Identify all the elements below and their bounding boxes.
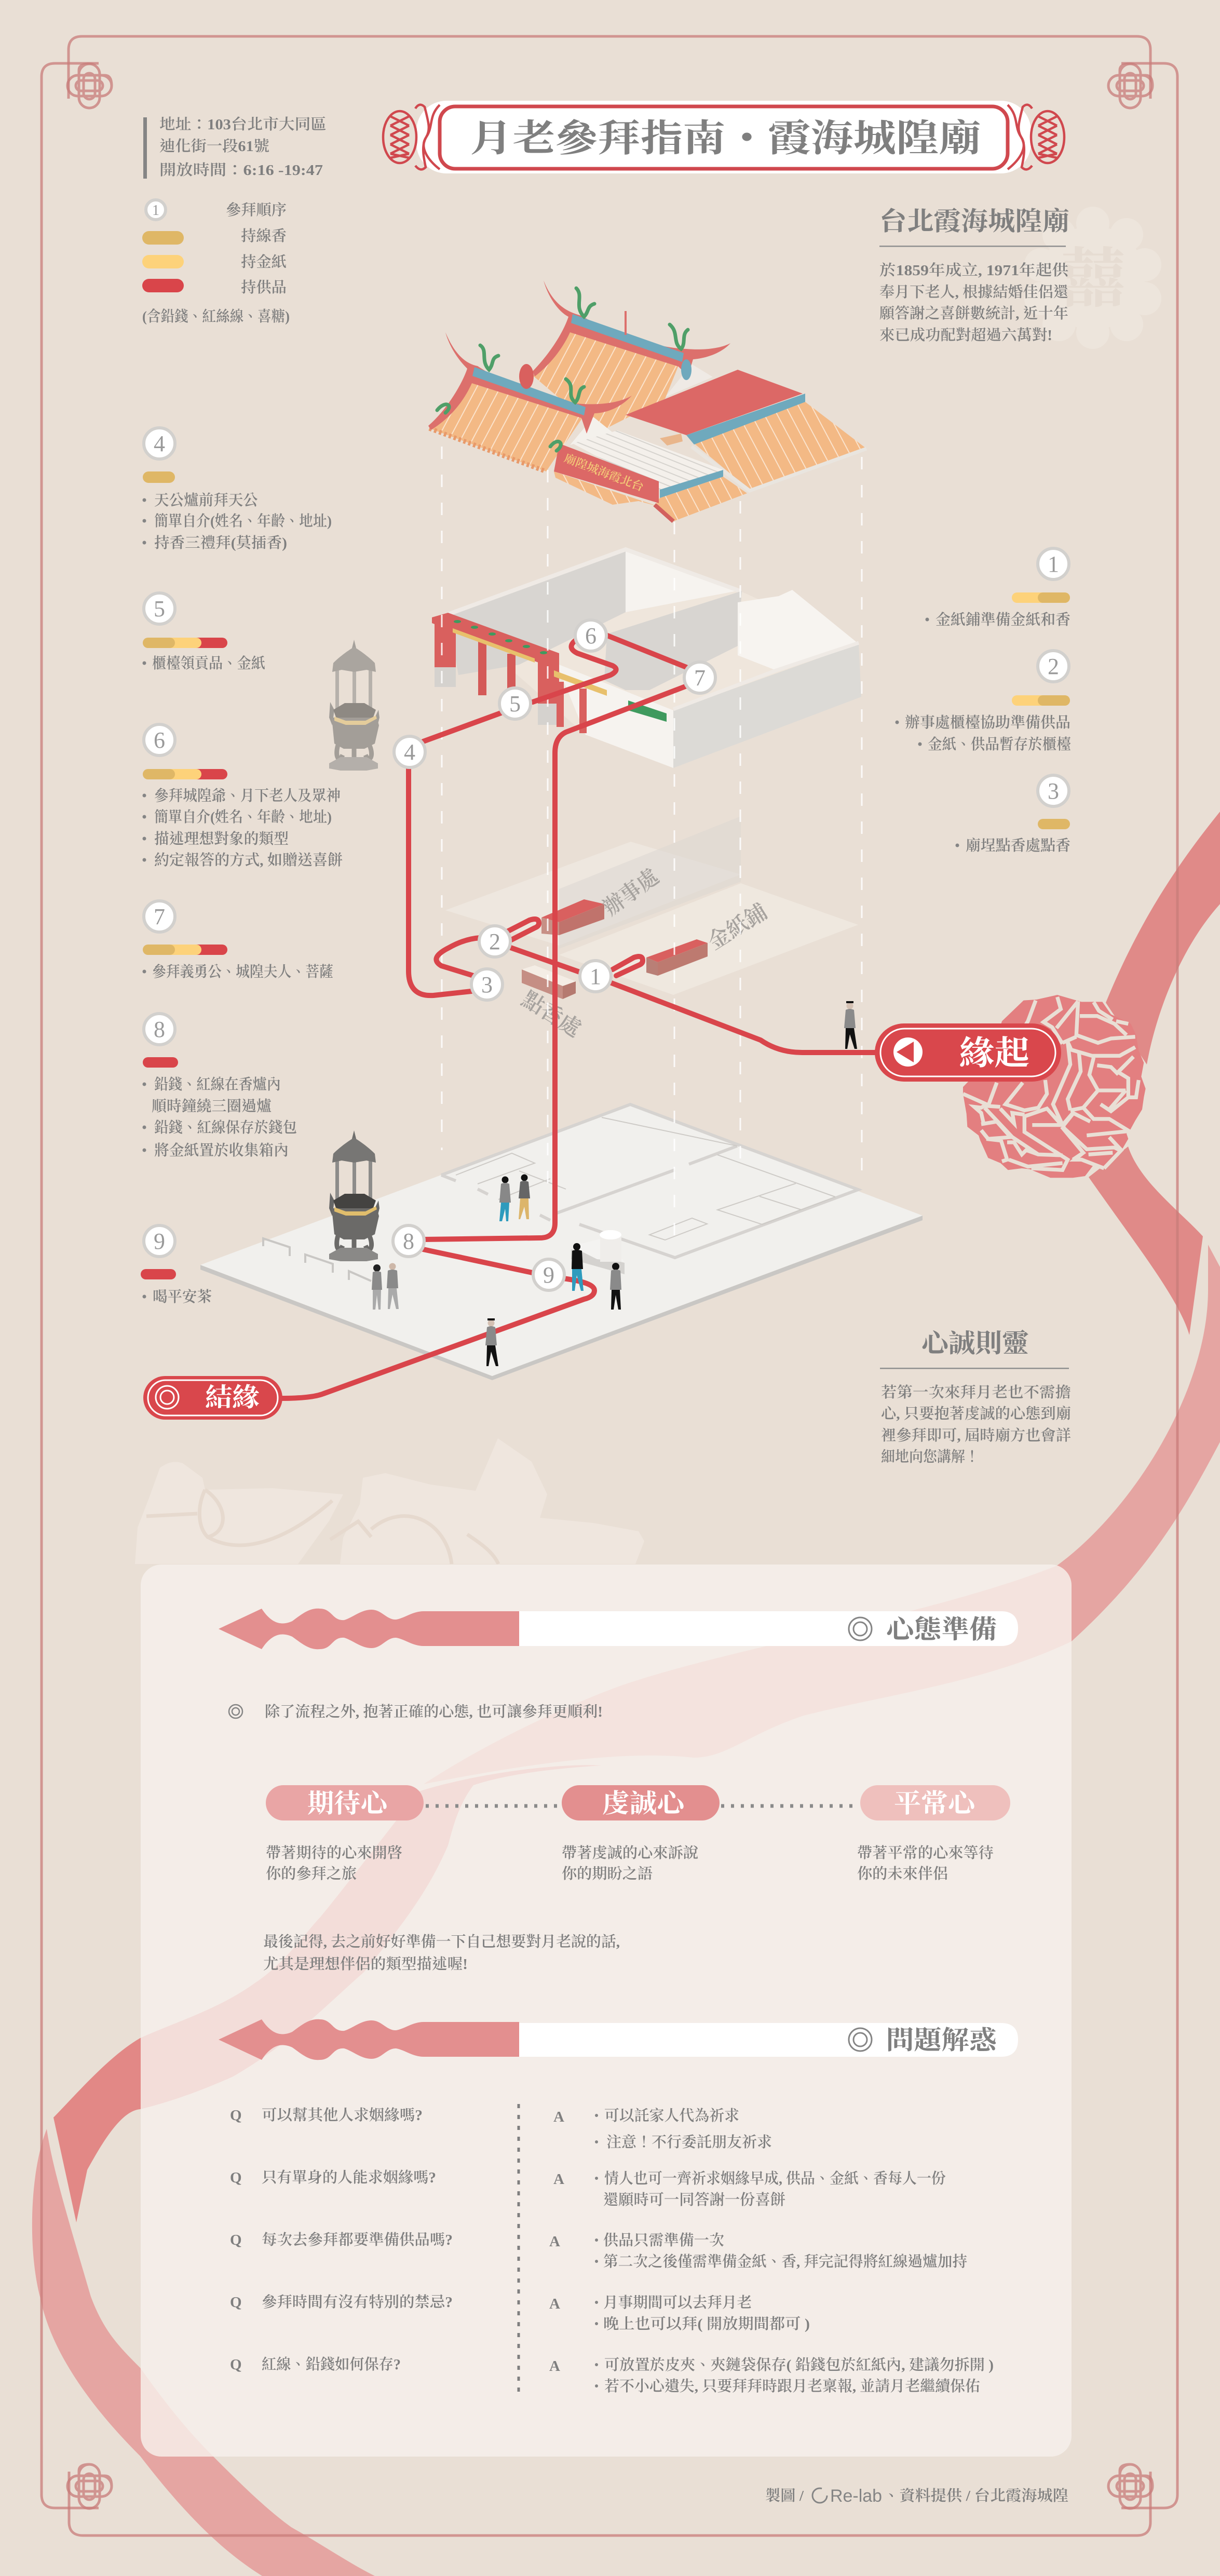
FAQ answers: 第二次之後僅需準備金紙、香, 拜完記得將紅線過爐加持 xyxy=(603,2253,967,2270)
credits: 、資料提供 / 台北霞海城隍 xyxy=(884,2487,1068,2504)
legend: 1 xyxy=(152,203,159,219)
pilgrimage route line xyxy=(281,636,877,1398)
tea counter xyxy=(571,1230,625,1274)
step 4 xyxy=(142,428,332,551)
front roof xyxy=(428,332,632,471)
marker 9: 9 xyxy=(543,1262,554,1288)
end pill: 結緣 xyxy=(205,1383,260,1412)
FAQ questions: 只有單身的人能求姻緣嗎? xyxy=(262,2169,436,2186)
step 9 xyxy=(141,1225,212,1305)
start pill xyxy=(875,1023,1061,1082)
step 7: 參拜義勇公、城隍夫人、菩薩 xyxy=(152,963,333,980)
step 4: 4 xyxy=(154,431,165,456)
address block: 開放時間：6:16 -19:47 xyxy=(159,161,323,179)
icon: right knot xyxy=(1008,105,1064,169)
step 8: 將金紙置於收集箱內 xyxy=(154,1142,289,1159)
step 5: 5 xyxy=(154,596,165,622)
step 4: 持香三禮拜(莫插香) xyxy=(154,534,287,551)
incense burner upper xyxy=(329,640,379,771)
FAQ answers: 還願時可一同答謝一份喜餅 xyxy=(603,2191,785,2208)
step 5 xyxy=(142,593,265,672)
step 4: 天公爐前拜天公 xyxy=(154,492,258,509)
marker 7 xyxy=(684,662,715,693)
icon: ring xyxy=(849,2028,872,2051)
person xyxy=(387,1263,399,1309)
watermark emblem: 囍 xyxy=(1060,226,1126,320)
step 6: 約定報答的方式, 如贈送喜餅 xyxy=(154,852,343,869)
FAQ questions: Q xyxy=(230,2294,242,2311)
step 5: 櫃檯領貢品、金紙 xyxy=(152,655,265,672)
pill: sincerity: 虔誠心 xyxy=(602,1789,687,1818)
sincerity note: 裡參拜即可, 屆時廟方也會詳 xyxy=(881,1427,1071,1444)
icon: left knot xyxy=(383,105,440,169)
legend: 參拜順序 xyxy=(226,201,287,219)
step 6 xyxy=(142,724,343,869)
legend: 持線香 xyxy=(241,227,287,245)
temple intro xyxy=(879,207,1161,349)
closing reminder: 尤其是理想伴侶的類型描述喔! xyxy=(263,1955,468,1973)
red temple gate xyxy=(432,613,607,733)
step 6: 描述理想對象的類型 xyxy=(154,830,289,847)
step 2: 2 xyxy=(1048,654,1059,679)
legend xyxy=(142,200,290,325)
ribbon: strand below flower xyxy=(1089,1147,1203,1335)
step 6: 簡單自介(姓名、年齡、地址) xyxy=(154,808,332,826)
FAQ answers xyxy=(549,2107,994,2395)
legend: (含鉛錢、紅絲線、喜糖) xyxy=(142,308,290,325)
step 4: 簡單自介(姓名、年齡、地址) xyxy=(154,512,332,530)
FAQ answers: 供品只需準備一次 xyxy=(603,2232,724,2249)
shop block: office xyxy=(541,899,604,935)
label: incense point: 點香處 xyxy=(518,987,586,1042)
temple intro: 來已成功配對超過六萬對! xyxy=(879,327,1052,344)
visitors on the plaza xyxy=(372,1001,857,1366)
FAQ answers: 月事期間可以去拜月老 xyxy=(603,2294,752,2311)
person at the start xyxy=(844,1001,857,1049)
person xyxy=(485,1318,498,1366)
step 1: 1 xyxy=(1048,551,1059,577)
person xyxy=(519,1175,530,1219)
mindset descriptions: 帶著期待的心來開啓 xyxy=(266,1844,402,1862)
mindset descriptions: 帶著平常的心來等待 xyxy=(857,1844,994,1862)
section header: FAQ: 問題解惑 xyxy=(886,2026,998,2055)
sincerity note: 心, 只要抱著虔誠的心態到廟 xyxy=(881,1405,1071,1422)
white building walls xyxy=(448,548,861,768)
step 6: 6 xyxy=(154,727,165,753)
credits: 製圖 / xyxy=(765,2487,804,2504)
mindset intro line: 除了流程之外, 抱著正確的心態, 也可讓參拜更順利! xyxy=(265,1703,603,1720)
FAQ questions: Q xyxy=(230,2169,242,2186)
FAQ answers: A xyxy=(553,2171,564,2188)
green sign xyxy=(628,700,667,722)
mindset descriptions xyxy=(266,1844,994,1882)
credits: Re-lab xyxy=(830,2486,882,2506)
end pill xyxy=(143,1376,282,1420)
FAQ answers: A xyxy=(549,2233,560,2250)
marker 6 xyxy=(575,620,606,651)
FAQ questions: 可以幫其他人求姻緣嗎? xyxy=(262,2107,423,2124)
address block: 地址：103台北市大同區 xyxy=(159,116,327,133)
person xyxy=(372,1264,382,1310)
step 9: 9 xyxy=(154,1229,165,1254)
FAQ answers: 可放置於皮夾、夾鏈袋保存( 鉛錢包於紅紙內, 建議勿拆開 ) xyxy=(604,2356,994,2373)
temple intro: 台北霞海城隍廟 xyxy=(879,207,1069,236)
step 8 xyxy=(142,1014,297,1159)
FAQ answers: A xyxy=(549,2358,560,2375)
marker 8: 8 xyxy=(403,1229,414,1254)
step 7 xyxy=(142,901,333,980)
icon: ring xyxy=(849,1617,872,1640)
marker 7: 7 xyxy=(694,665,706,691)
icon: double ring xyxy=(156,1386,179,1409)
mindset descriptions: 你的參拜之旅 xyxy=(266,1865,357,1882)
centre roof and signboard xyxy=(554,430,747,521)
step 7: 7 xyxy=(154,904,165,929)
ground floor plate xyxy=(200,1104,923,1380)
legend: 持供品 xyxy=(241,279,287,296)
label: paper shop: 金紙鋪 xyxy=(703,899,771,954)
upper floor ghost plates with shops xyxy=(445,816,858,1042)
sincerity note: 若第一次來拜月老也不需擔 xyxy=(881,1384,1071,1401)
FAQ answers: 情人也可一齊祈求姻緣早成, 供品、金紙、香每人一份 xyxy=(604,2170,946,2187)
closing reminder xyxy=(263,1933,620,1973)
step 9: 喝平安茶 xyxy=(153,1288,212,1305)
pill: expectation xyxy=(266,1785,424,1820)
step 8: 鉛錢、紅線保存於錢包 xyxy=(154,1119,297,1136)
step 1: 金紙鋪準備金紙和香 xyxy=(936,611,1070,628)
ribbon: sweep to lower left xyxy=(53,1765,602,2222)
address block xyxy=(143,116,327,179)
label: office: 辦事處 xyxy=(599,865,663,921)
marker 9 xyxy=(533,1259,564,1290)
FAQ questions: Q xyxy=(230,2356,242,2373)
start pill: 緣起 xyxy=(959,1035,1029,1072)
person xyxy=(572,1243,584,1291)
step 6: 參拜城隍爺、月下老人及眾神 xyxy=(154,787,341,804)
marker 8 xyxy=(393,1225,424,1257)
marker 1: 1 xyxy=(590,964,601,989)
FAQ answers: 可以託家人代為祈求 xyxy=(604,2107,739,2124)
icon: play back xyxy=(893,1037,923,1067)
back roof xyxy=(533,280,730,432)
shop block: incense point xyxy=(522,965,576,999)
section header: FAQ xyxy=(219,2019,1018,2060)
step 8: 8 xyxy=(154,1017,165,1042)
ribbon: long sweep from right xyxy=(424,1245,1220,1784)
marker 3 xyxy=(471,969,503,1000)
sincerity note: 心誠則靈 xyxy=(921,1329,1029,1358)
FAQ divider xyxy=(517,2104,520,2393)
ribbon: upper strand into flower xyxy=(1106,812,1220,1064)
temple intro: 於1859年成立, 1971年起供 xyxy=(879,262,1069,279)
step 2 xyxy=(895,651,1071,753)
step 1 xyxy=(925,548,1070,628)
temple roof illustration xyxy=(428,280,866,521)
marker 3: 3 xyxy=(481,972,493,997)
step 3 xyxy=(955,775,1070,854)
person xyxy=(499,1177,511,1221)
FAQ answers: 注意！不行委託朋友祈求 xyxy=(606,2133,772,2151)
right hall roof xyxy=(626,370,866,491)
marker 2 xyxy=(479,926,510,957)
step 3: 廟埕點香處點香 xyxy=(966,837,1070,854)
FAQ questions: 參拜時間有沒有特別的禁忌? xyxy=(262,2294,453,2311)
FAQ questions: 每次去參拜都要準備供品嗎? xyxy=(262,2231,453,2248)
step 2: 金紙、供品暫存於櫃檯 xyxy=(928,736,1071,753)
FAQ questions: Q xyxy=(230,2107,242,2124)
icon: roof flower xyxy=(519,364,534,389)
FAQ answers: A xyxy=(553,2109,564,2125)
FAQ answers: 晚上也可以拜( 開放期間都可 ) xyxy=(603,2315,810,2332)
marker 2: 2 xyxy=(489,929,500,954)
lower panel background xyxy=(141,1565,1072,2457)
ribbon: bottom-left loop xyxy=(32,2129,375,2576)
marker 6: 6 xyxy=(585,623,597,649)
step 2: 辦事處櫃檯協助準備供品 xyxy=(905,714,1070,731)
pill: expectation: 期待心 xyxy=(307,1789,390,1818)
FAQ questions: Q xyxy=(230,2232,242,2248)
FAQ answers: 若不小心遺失, 只要拜拜時跟月老稟報, 並請月老繼續保佑 xyxy=(604,2378,980,2395)
section header: mindset xyxy=(219,1609,1018,1649)
legend: 持金紙 xyxy=(241,253,287,271)
pill: calm xyxy=(860,1785,1010,1820)
mindset pills xyxy=(266,1785,1010,1820)
sincerity note xyxy=(880,1329,1071,1465)
mindset descriptions: 帶著虔誠的心來訴說 xyxy=(562,1844,699,1862)
route markers xyxy=(393,620,715,1290)
marker 4 xyxy=(394,736,425,767)
watermark emblem xyxy=(1024,207,1161,349)
signboard text: 廟隍城海霞北台 xyxy=(562,451,646,494)
temple intro: 願答謝之喜餅數統計, 近十年 xyxy=(879,305,1068,322)
step 3: 3 xyxy=(1048,778,1059,804)
FAQ questions: 紅線、鉛錢如何保存? xyxy=(262,2356,401,2373)
FAQ questions xyxy=(230,2107,453,2373)
FAQ answers: A xyxy=(549,2296,560,2312)
title banner xyxy=(383,101,1064,173)
pill: sincerity xyxy=(562,1785,720,1820)
marker 5: 5 xyxy=(509,691,521,717)
mindset descriptions: 你的期盼之語 xyxy=(562,1865,653,1882)
flower knot xyxy=(963,995,1146,1178)
section header: mindset: 心態準備 xyxy=(886,1615,997,1644)
incense burner lower xyxy=(329,1130,379,1261)
shop block: paper shop xyxy=(646,939,708,976)
sincerity note: 細地向您講解！ xyxy=(881,1448,979,1465)
marker 5 xyxy=(499,688,531,719)
step 8: 順時鐘繞三圈過爐 xyxy=(152,1098,272,1115)
closing reminder: 最後記得, 去之前好好準備一下自己想要對月老說的話, xyxy=(263,1933,620,1950)
temple intro: 奉月下老人, 根據結婚佳侶還 xyxy=(879,284,1068,301)
railings xyxy=(263,1238,371,1281)
icon: roof dragons xyxy=(437,288,688,451)
mindset descriptions: 你的未來伴侶 xyxy=(857,1865,948,1882)
pill: calm: 平常心 xyxy=(894,1789,978,1818)
vertical dashed guides xyxy=(442,447,862,1246)
marker 1 xyxy=(580,961,611,992)
person xyxy=(610,1263,621,1310)
address block: 迪化街一段61號 xyxy=(159,138,269,155)
title banner: 月老參拜指南・霞海城隍廟 xyxy=(470,118,981,159)
step 8: 鉛錢、紅線在香爐內 xyxy=(154,1076,281,1093)
credits xyxy=(765,2486,1068,2506)
marker 4: 4 xyxy=(404,739,415,765)
watermark: mandarin ducks xyxy=(135,1438,644,1564)
